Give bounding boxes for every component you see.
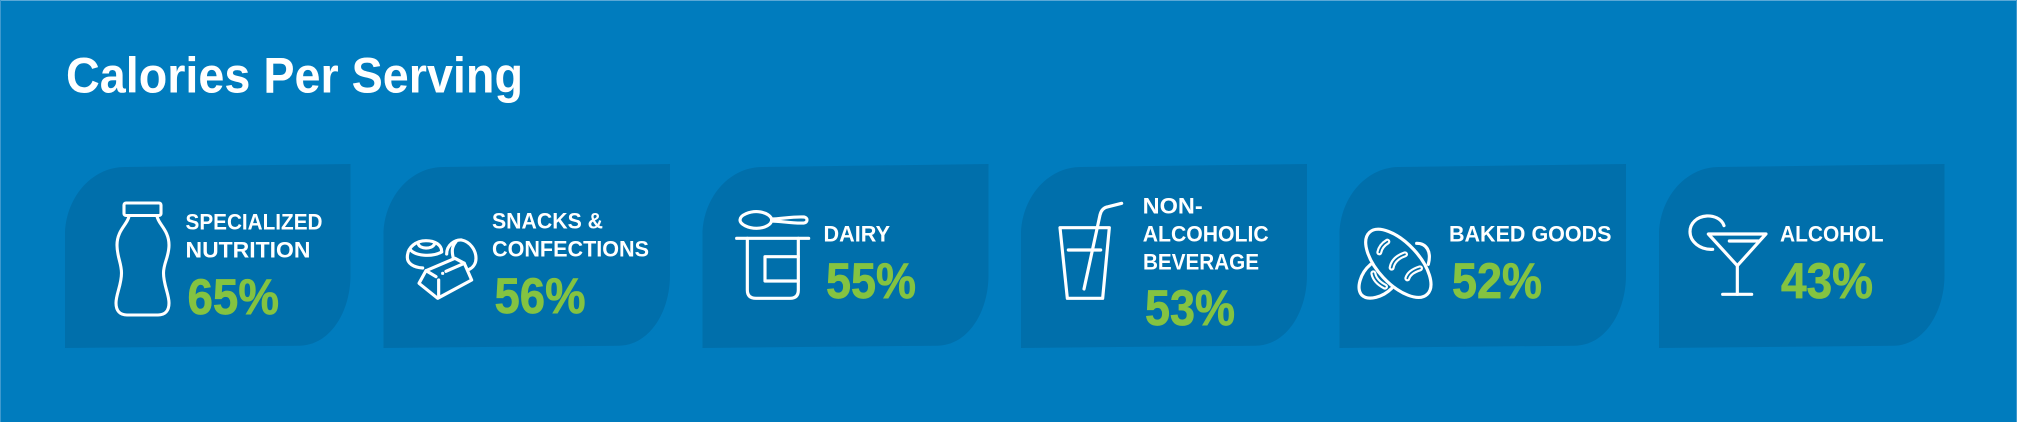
label: ALCOHOL	[1780, 222, 1884, 247]
label	[186, 210, 322, 263]
card background	[1659, 164, 1944, 348]
card background	[65, 164, 350, 348]
label: NUTRITION	[186, 238, 310, 263]
label	[492, 208, 649, 262]
card background	[702, 164, 988, 348]
icon: bottle	[116, 203, 169, 315]
panel: specialized nutrition	[65, 164, 350, 348]
percentage: 56%	[494, 268, 586, 324]
label: CONFECTIONS	[492, 237, 649, 262]
icon: bread	[1354, 218, 1442, 308]
card background	[1021, 164, 1307, 348]
percentage: 65%	[188, 269, 279, 325]
label: BAKED GOODS	[1449, 222, 1612, 247]
icon: chocolates	[407, 240, 476, 298]
label: BEVERAGE	[1143, 250, 1259, 275]
icon: yogurt cup and spoon	[737, 212, 809, 298]
panel: alcohol	[1659, 164, 1944, 348]
percentage: 53%	[1145, 280, 1235, 336]
label: NON-	[1143, 194, 1203, 219]
icon: martini glass	[1690, 216, 1766, 294]
label: SPECIALIZED	[186, 210, 322, 234]
label: DAIRY	[824, 222, 890, 247]
panel: dairy	[702, 164, 988, 348]
percentage: 52%	[1452, 253, 1542, 309]
card background	[384, 164, 670, 348]
percentage: 43%	[1781, 253, 1873, 309]
card background	[1340, 164, 1626, 348]
title: Calories Per Serving	[66, 48, 523, 104]
panel: baked goods	[1340, 164, 1626, 348]
panel: snacks and confections	[384, 164, 670, 348]
percentage: 55%	[826, 253, 916, 309]
label	[1143, 194, 1269, 275]
label: SNACKS &	[492, 208, 603, 234]
panel: non-alcoholic beverage	[1021, 164, 1307, 348]
icon: glass with straw	[1060, 203, 1122, 298]
label: ALCOHOLIC	[1143, 222, 1269, 247]
